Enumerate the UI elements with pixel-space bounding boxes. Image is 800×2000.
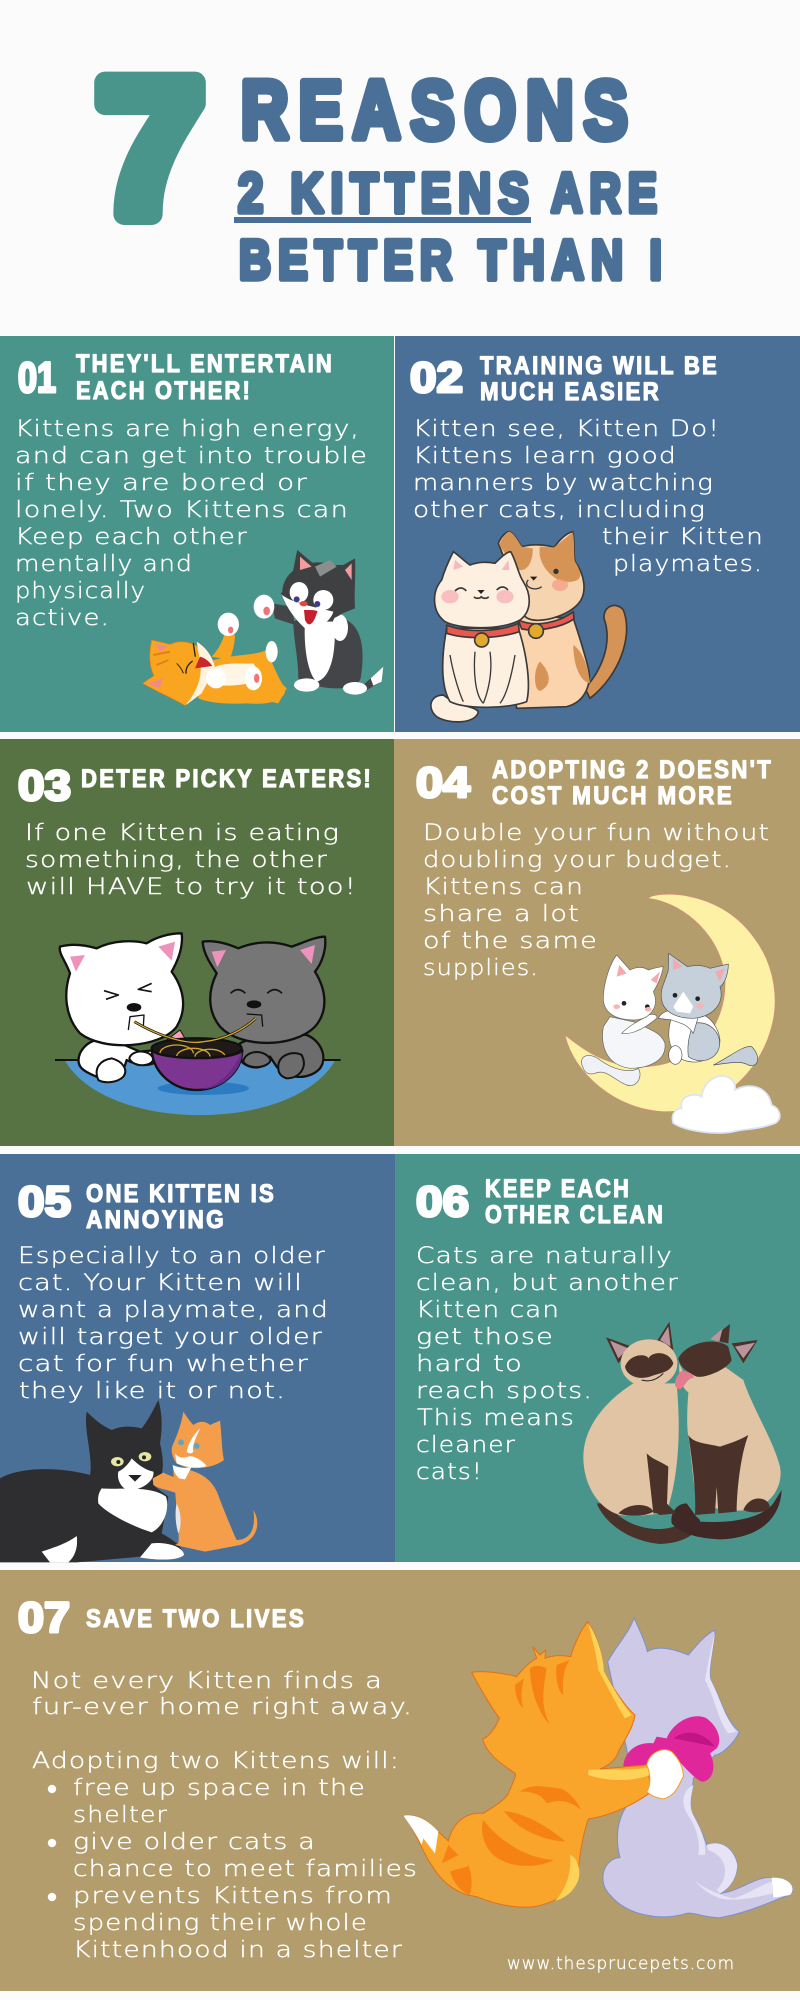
body text 04: Kittens can bbox=[423, 874, 584, 900]
body text 07 bbox=[31, 1668, 413, 1774]
heading 01: EACH OTHER! bbox=[76, 377, 252, 405]
body text 06: get those bbox=[416, 1324, 554, 1350]
body text 06: hard to bbox=[416, 1351, 523, 1377]
body text 07: fur-ever home right away. bbox=[32, 1694, 413, 1720]
body text 01: lonely. Two Kittens can bbox=[15, 497, 349, 523]
illustration: siamese cats grooming bbox=[583, 1322, 782, 1544]
body text 05: cat for fun whether bbox=[18, 1351, 309, 1377]
bullet list: give older cats a bbox=[73, 1829, 316, 1855]
body text 06: Cats are naturally bbox=[416, 1243, 673, 1269]
bullet list: Kittenhood in a shelter bbox=[73, 1937, 403, 1963]
body text 01 bbox=[15, 416, 368, 631]
number 07: 07 bbox=[18, 1594, 70, 1642]
website credit: www.thesprucepets.com bbox=[507, 1954, 735, 1974]
body text 02: Kitten see, Kitten Do! bbox=[413, 416, 720, 442]
body text 03: will HAVE to try it too! bbox=[26, 874, 357, 900]
heading 01: THEY'LL ENTERTAIN bbox=[76, 350, 334, 378]
heading 03: DETER PICKY EATERS! bbox=[81, 765, 373, 793]
number 05: 05 bbox=[18, 1178, 71, 1226]
body text 05: want a playmate, and bbox=[18, 1297, 329, 1323]
body text 02: other cats, including bbox=[413, 497, 706, 523]
heading 07: SAVE TWO LIVES bbox=[86, 1605, 306, 1633]
heading 05 bbox=[86, 1180, 276, 1234]
body text 01: Keep each other bbox=[15, 524, 248, 550]
body text 07: Adopting two Kittens will: bbox=[32, 1748, 400, 1774]
illustration: playing kittens bbox=[143, 550, 383, 706]
panel 04: cost bbox=[394, 739, 800, 1146]
body text 05: will target your older bbox=[18, 1324, 323, 1350]
panel 05: annoying bbox=[0, 1154, 395, 1562]
heading 06: KEEP EACH bbox=[485, 1175, 631, 1203]
panel 01: entertain each other bbox=[0, 336, 394, 732]
body text 04: of the same bbox=[423, 928, 598, 954]
heading 02: TRAINING WILL BE bbox=[480, 352, 719, 380]
heading 04: COST MUCH MORE bbox=[492, 782, 734, 810]
body text 02: their Kitten bbox=[602, 524, 764, 550]
body text 06: This means bbox=[417, 1405, 575, 1431]
body text 02: playmates. bbox=[613, 551, 763, 577]
body text 01: if they are bored or bbox=[15, 470, 308, 496]
body text 06: cleaner bbox=[416, 1432, 516, 1458]
heading 06 bbox=[485, 1175, 665, 1229]
illustration: kittens sharing noodles bbox=[55, 933, 341, 1115]
body text 02: Kittens learn good bbox=[413, 443, 677, 469]
bullet list: chance to meet families bbox=[73, 1856, 418, 1882]
heading 06: OTHER CLEAN bbox=[485, 1201, 665, 1229]
bullet list: free up space in the bbox=[73, 1775, 366, 1801]
bullet list: prevents Kittens from bbox=[73, 1883, 393, 1909]
bullet list: spending their whole bbox=[73, 1910, 368, 1936]
heading line: 2 kittens are: 2 KITTENS bbox=[238, 161, 536, 224]
body text 04: doubling your budget. bbox=[423, 847, 732, 873]
heading 04 bbox=[492, 756, 773, 810]
illustration: orange and lilac cats from behind bbox=[403, 1618, 793, 1918]
body text 01: mentally and bbox=[15, 551, 193, 577]
illustration: kittens on crescent moon bbox=[565, 894, 780, 1133]
number 04: 04 bbox=[416, 759, 470, 807]
number 03: 03 bbox=[18, 762, 71, 810]
body text 07: Not every Kitten finds a bbox=[31, 1668, 383, 1694]
body text 04 bbox=[423, 820, 770, 981]
body text 03 bbox=[25, 820, 357, 900]
heading line: 2 kittens are: ARE bbox=[551, 161, 664, 224]
body text 04: supplies. bbox=[423, 955, 539, 981]
illustration: two cuddling cats bbox=[431, 532, 627, 722]
body text 06: cats! bbox=[416, 1459, 483, 1485]
heading 02: MUCH EASIER bbox=[480, 378, 661, 406]
heading 05: ANNOYING bbox=[86, 1206, 226, 1234]
body text 02 bbox=[413, 416, 764, 577]
number 06: 06 bbox=[416, 1178, 469, 1226]
bullet list bbox=[48, 1775, 418, 1963]
number 02: 02 bbox=[410, 354, 463, 402]
heading 01 bbox=[76, 350, 334, 405]
body text 01: active. bbox=[15, 605, 110, 631]
body text 04: Double your fun without bbox=[423, 820, 770, 846]
body text 03: something, the other bbox=[25, 847, 328, 873]
panel 03: picky eaters bbox=[0, 739, 394, 1146]
body text 05 bbox=[18, 1243, 329, 1404]
body text 05: cat. Your Kitten will bbox=[18, 1270, 303, 1296]
heading 04: ADOPTING 2 DOESN'T bbox=[492, 756, 773, 784]
body text 01: Kittens are high energy, bbox=[15, 416, 360, 442]
body text 01: physically bbox=[15, 578, 146, 604]
big number 7: 7 bbox=[97, 42, 203, 255]
body text 04: share a lot bbox=[423, 901, 580, 927]
body text 06 bbox=[416, 1243, 679, 1485]
body text 06: clean, but another bbox=[416, 1270, 679, 1296]
panel 02: training bbox=[395, 336, 800, 732]
body text 03: If one Kitten is eating bbox=[25, 820, 340, 846]
heading word: reasons: REASONS bbox=[241, 65, 638, 156]
body text 06: Kitten can bbox=[416, 1297, 560, 1323]
panel 06: clean bbox=[395, 1154, 800, 1562]
body text 02: manners by watching bbox=[413, 470, 714, 496]
body text 05: Especially to an older bbox=[18, 1243, 326, 1269]
heading line: better than 1: BETTER THAN I bbox=[239, 228, 669, 291]
panel 07: save two lives bbox=[0, 1570, 800, 1991]
heading 02 bbox=[480, 352, 719, 406]
body text 01: and can get into trouble bbox=[15, 443, 368, 469]
number 01: 01 bbox=[18, 354, 56, 402]
illustration: black cat and orange kitten bbox=[0, 1400, 257, 1562]
title bbox=[97, 42, 669, 291]
heading 05: ONE KITTEN IS bbox=[86, 1180, 276, 1208]
bullet list: shelter bbox=[73, 1802, 168, 1828]
body text 06: reach spots. bbox=[416, 1378, 593, 1404]
body text 05: they like it or not. bbox=[19, 1378, 286, 1404]
